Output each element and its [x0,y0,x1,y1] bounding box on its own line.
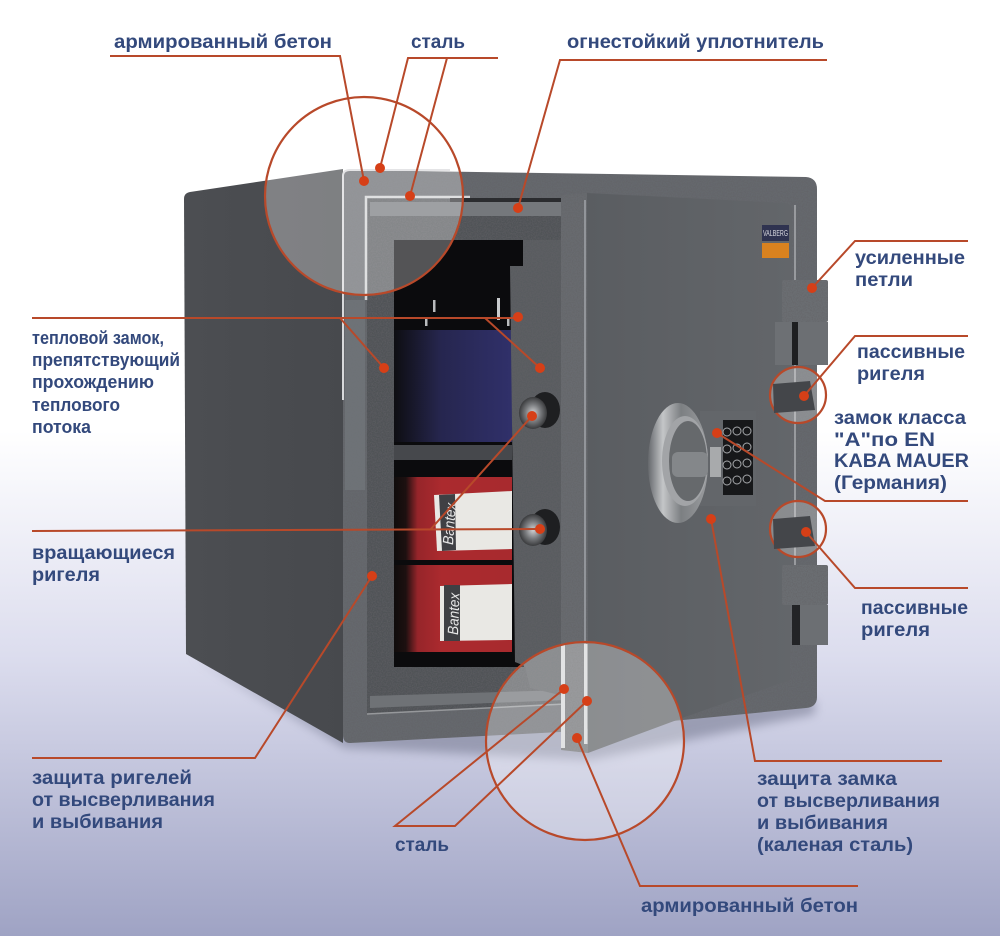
callout: lock drill protection: и выбивания [757,813,888,834]
callout: reinforced hinges [807,241,968,293]
callout: steel top: сталь [411,32,465,53]
inner frame [367,198,565,714]
frame left lighter strip [345,300,365,490]
callout: rotating bolts: вращающиеся [32,543,175,564]
ground shadow [190,655,815,760]
callout: steel bottom [395,684,592,856]
passive bolt upper with circle [770,367,826,423]
callout: passive bolts upper: ригеля [857,364,925,385]
door edge [561,193,589,644]
rotating bolt lower [519,509,560,546]
callout: reinforced hinges: петли [855,270,913,291]
safe front frame [343,170,817,743]
zoom circle: top [265,97,463,295]
callout: thermal lock: тепловой замок, [32,328,164,348]
blue box [394,298,512,442]
callout: bolt drill protection: защита ригелей [32,768,192,789]
seal bottom [370,690,565,708]
callout: thermal lock [32,312,545,437]
upper hinge [775,280,828,365]
lock dial [648,403,708,523]
safe illustration [184,169,828,760]
callout: lock drill protection [706,514,942,856]
frame edge highlight [343,170,450,400]
callout: rotating bolts [32,411,545,586]
callout: lock class A: замок класса [834,408,966,429]
red binder lower [394,565,512,652]
keypad [723,420,753,495]
frame right light line [794,205,796,565]
lock plate [700,411,756,506]
callout: bolt drill protection [32,571,377,833]
callout: steel bottom: сталь [395,835,449,856]
callout: passive bolts upper: пассивные [857,342,965,363]
callout: fire-resistant seal: огнестойкий уплотнитель [567,32,824,53]
lower hinge [782,565,828,645]
red binder upper: Bantex [440,502,460,545]
rubber seal band [370,202,562,216]
callout: lock class A [712,408,969,501]
dark gap above seal [450,198,562,202]
door front [587,193,792,753]
callout: armoured concrete bottom [572,733,858,917]
callout: passive bolts lower: пассивные [861,598,968,619]
callout: lock drill protection: от высверливания [757,791,940,812]
shelf [394,445,512,460]
callout: bolt drill protection: от высверливания [32,790,215,811]
callout: passive bolts upper [799,336,968,401]
safe side wall [184,169,343,743]
callout: bolt drill protection: и выбивания [32,812,163,833]
brand plate [762,225,789,258]
callout: lock class A: KABA MAUER [834,451,969,472]
callout: thermal lock: прохождению [32,372,154,392]
callout: fire-resistant seal [513,32,827,213]
door inner panel [510,240,564,696]
callout: passive bolts lower [801,527,968,641]
callout: lock drill protection: (каленая сталь) [757,835,913,856]
passive bolt lower with circle [770,501,826,557]
callout: thermal lock: теплового [32,395,120,415]
callout: thermal lock: препятствующий [32,350,180,370]
callout: lock class A: (Германия) [834,473,947,494]
callout: reinforced hinges: усиленные [855,248,965,269]
callout: thermal lock: потока [32,417,92,437]
callout: armoured concrete top: армированный бетон [114,32,332,53]
frame inner bottom edge highlight [367,704,565,714]
callout: armoured concrete bottom: армированный бетон [641,896,858,917]
callout: passive bolts lower: ригеля [861,620,930,641]
safe interior [394,240,524,667]
callout: lock drill protection: защита замка [757,769,897,790]
door edge cut showing layers [561,644,588,753]
zoom circle: bottom [486,642,684,840]
red binder lower: Bantex [445,592,463,635]
callout: lock class A: "А"по EN [834,430,935,451]
frame inner highlight [366,197,470,300]
rotating bolt upper [519,392,560,429]
callout: steel top [375,32,498,201]
small display [710,447,721,477]
brand plate: VALBERG [763,229,788,238]
callout: armoured concrete top [110,32,369,186]
red binder upper [394,477,512,560]
callout: rotating bolts: ригеля [32,565,100,586]
